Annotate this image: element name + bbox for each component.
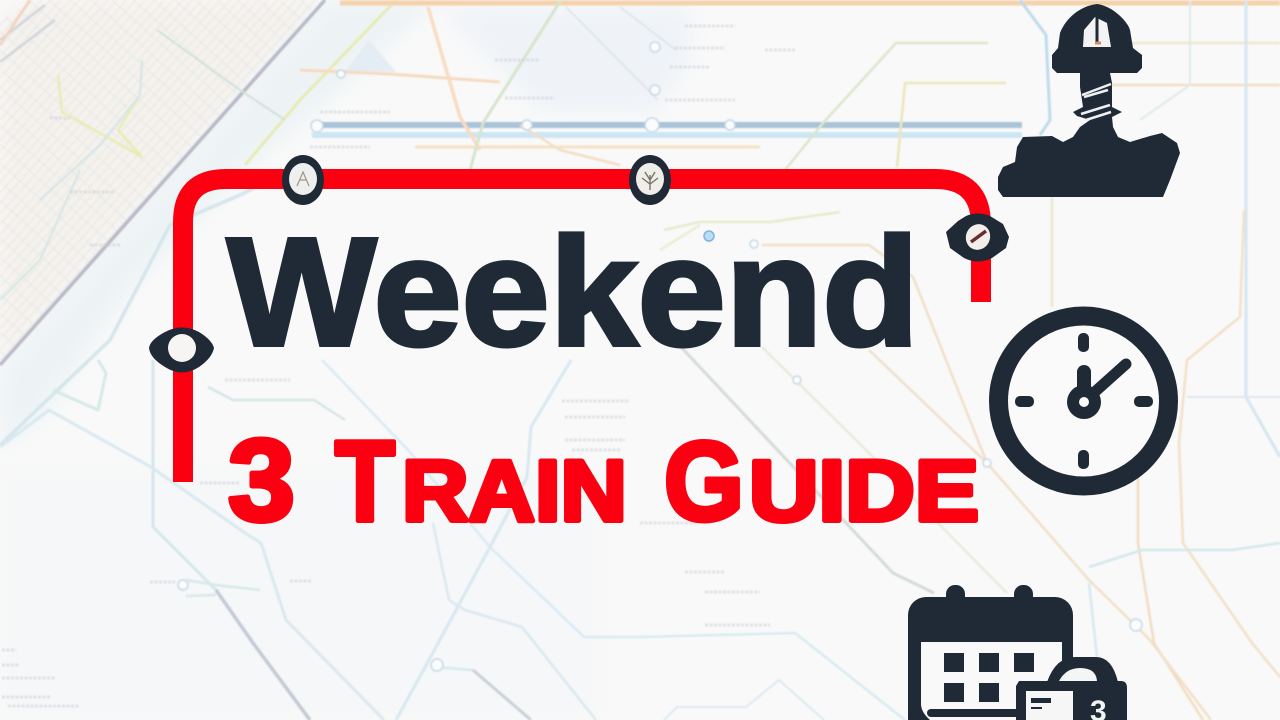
- icon: calendar with bag: [908, 585, 1127, 720]
- icon: clock: [998, 316, 1168, 486]
- subtitle: 3 Train Guide: UIDE: [749, 444, 979, 540]
- calendar: [908, 585, 1073, 720]
- map: label smudges: [2, 26, 795, 706]
- upper left: [0, 0, 325, 365]
- shopping bag: [1016, 657, 1127, 720]
- top band: [340, 0, 1280, 6]
- subtitle: 3 Train Guide: [228, 415, 979, 546]
- red route line: [183, 179, 981, 482]
- station marker: top 1: [282, 155, 324, 205]
- subtitle: 3 Train Guide: 3: [228, 415, 295, 545]
- map: dense street district: [0, 0, 320, 365]
- centre: [664, 212, 840, 230]
- map: soft colour washes: [0, 0, 690, 720]
- icon: train attendant silhouette: [998, 4, 1180, 197]
- subtitle: 3 Train Guide: G: [664, 419, 744, 544]
- station marker: left: [149, 328, 214, 372]
- subtitle: 3 Train Guide: T: [335, 418, 395, 546]
- subtitle: 3 Train Guide: RAIN: [402, 444, 627, 540]
- upper right: [1020, 0, 1050, 135]
- station marker: top 2: [629, 155, 671, 205]
- map: station dots: [178, 42, 1142, 671]
- map: blue station: [704, 231, 714, 241]
- lower left: [153, 360, 216, 590]
- station marker: right: [946, 214, 1009, 262]
- title: Weekend: Weekend: [227, 206, 919, 378]
